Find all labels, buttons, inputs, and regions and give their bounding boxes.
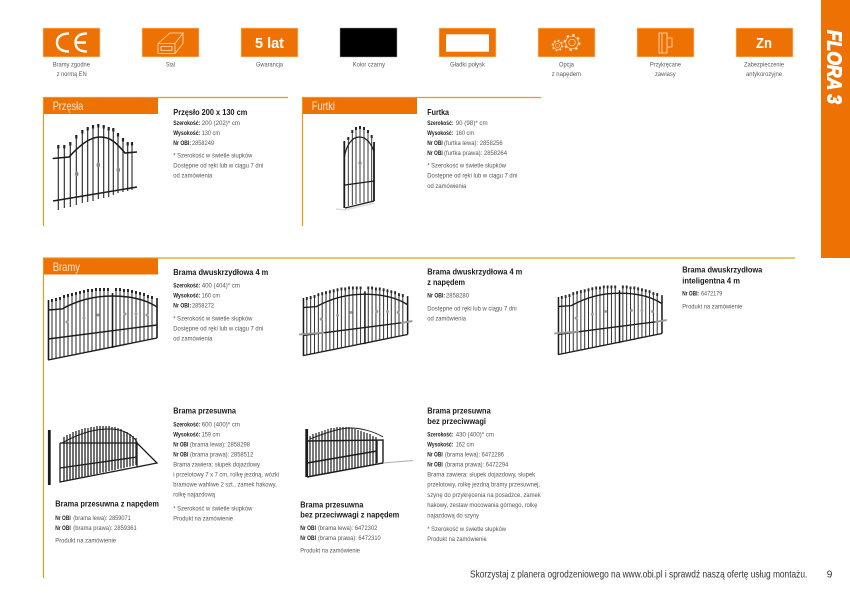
text block: Furtka: od zamówienia xyxy=(427,183,467,190)
text block: Brama przesuwna: Brama zawiera: słupek dojazdowy xyxy=(173,462,261,469)
text block: Brama przesuwna: rolkę najazdową xyxy=(173,492,215,499)
text block: Furtka xyxy=(427,108,517,190)
label: anticorrosion: antykorozyjne xyxy=(746,71,782,78)
label: warranty: Gwarancja xyxy=(256,62,283,69)
image: wicket gate xyxy=(336,126,374,210)
text block: Brama dwuskrzydłowa 4 m: Szerokość: xyxy=(173,284,200,290)
label: option with motor: z napędem xyxy=(552,71,581,78)
label: option with motor: Opcja xyxy=(559,62,574,69)
text block: Brama przesuwna: Nr OBI xyxy=(173,453,189,459)
text block: Brama przesuwna: i przelotowy 7 x 7 cm, rolkę jezdną, wózki xyxy=(173,472,279,479)
image: double gate xyxy=(48,288,157,360)
text block: Brama przesuwna bez przeciwwagi: Brama zawiera: słupek dojazdowy, słupek xyxy=(427,472,536,479)
text block: Brama dwuskrzydłowa z napędem: od zamówienia xyxy=(427,316,466,323)
text block: Brama inteligentna: Brama dwuskrzydłowa xyxy=(682,265,763,274)
heading: Przęsła: Przęsła xyxy=(53,99,84,113)
text block: Furtka: * Szerokość w świetle słupków xyxy=(427,163,506,170)
panel: Furtki xyxy=(302,98,541,226)
text block: Brama dwuskrzydłowa 4 m: Wysokość: xyxy=(173,294,200,300)
text block: Furtka: (furtka lewa): 2858256 xyxy=(444,140,503,147)
side tab: FLORA 3 xyxy=(821,0,850,258)
text block: Furtka: 160 cm xyxy=(456,130,474,137)
panel: Przęsła xyxy=(44,98,288,226)
text block: Furtka: Nr OBI xyxy=(427,141,443,147)
text block: Brama dwuskrzydłowa 4 m: * Szerokość w świetle słupków xyxy=(173,316,253,323)
text block: Brama dwuskrzydłowa 4 m: 400 (404)* cm xyxy=(202,283,240,290)
text block: Brama przesuwna bez przeciwwagi: (brama prawa): 6472294 xyxy=(445,462,509,469)
text block: Brama przesuwna: Nr OBI xyxy=(173,443,189,449)
label: colour: Kolor czarny xyxy=(353,62,386,69)
text block: Brama przesuwna z napędem: (brama prawa): 2859361 xyxy=(73,525,137,532)
text block: Brama przesuwna bez przeciwwagi z napędem: (brama prawa): 6472310 xyxy=(318,535,381,542)
text block: Brama przesuwna: Wysokość: xyxy=(173,433,200,439)
label: CE: z normą EN xyxy=(57,71,87,78)
text block: Brama przesuwna bez przeciwwagi xyxy=(427,406,541,543)
text block: Brama przesuwna bez przeciwwagi z napędem xyxy=(300,500,399,555)
text block: Brama dwuskrzydłowa 4 m: 2858272 xyxy=(192,303,214,310)
label: option with motor xyxy=(552,62,581,78)
text block: Brama przesuwna: Brama przesuwna xyxy=(173,406,237,415)
label: hinges: Przykręcane xyxy=(650,62,681,69)
text block: Brama przesuwna bez przeciwwagi: najazdową do szyny xyxy=(427,513,480,520)
panel: Bramy xyxy=(44,258,795,578)
text block: Brama przesuwna bez przeciwwagi: szynę do przykręcenia na posadzce, zamek xyxy=(427,492,541,499)
text block: Brama przesuwna: Produkt na zamówienie xyxy=(173,516,233,523)
text block: Brama dwuskrzydłowa 4 m: 160 cm xyxy=(202,293,220,300)
text block: Brama przesuwna: * Szerokość w świetle słupków xyxy=(173,506,253,513)
text block: Brama dwuskrzydłowa 4 m: Nr OBI: xyxy=(173,304,191,310)
text block: Brama dwuskrzydłowa z napędem: Brama dwuskrzydłowa 4 m xyxy=(427,267,522,276)
label: CE xyxy=(53,62,90,78)
image: sliding gate without counterweight xyxy=(307,427,413,477)
label: steel: Stal xyxy=(166,62,175,69)
text block: Przęsło: * Szerokość w świetle słupków xyxy=(173,153,253,160)
text block: Brama przesuwna bez przeciwwagi: Brama przesuwna xyxy=(427,406,491,415)
text block: Brama dwuskrzydłowa 4 m: Brama dwuskrzydłowa 4 m xyxy=(173,268,268,277)
icon: 5 year warranty xyxy=(241,28,298,57)
text block: Przęsło: Nr OBI: xyxy=(173,141,191,147)
text block: Brama inteligentna: 6472179 xyxy=(701,291,723,298)
text block: Brama inteligentna xyxy=(682,265,763,310)
text block: Przęsło: 2858249 xyxy=(192,140,214,147)
text block: Furtka: (furtka prawa): 2858264 xyxy=(444,150,507,157)
text block: Furtka: 90 (98)* cm xyxy=(456,120,488,127)
text block: Przęsło: 130 cm xyxy=(202,130,220,137)
text block: Brama inteligentna: Produkt na zamówienie xyxy=(682,303,743,310)
text block: Brama inteligentna: Nr OBI: xyxy=(682,292,699,298)
label: gloss: Gładki połysk xyxy=(450,62,486,69)
label: anticorrosion xyxy=(744,62,784,78)
icon: bolted hinges xyxy=(637,28,694,57)
text block: Brama przesuwna bez przeciwwagi z napędem: (brama lewa): 6472302 xyxy=(318,525,378,532)
text block: Brama dwuskrzydłowa 4 m: od zamówienia xyxy=(173,336,213,343)
text block: Brama dwuskrzydłowa z napędem: Nr OBI: xyxy=(427,294,445,300)
icon: CE mark xyxy=(43,28,100,57)
text block: Brama inteligentna: inteligentna 4 m xyxy=(682,276,740,285)
text block: Brama przesuwna bez przeciwwagi z napędem: Brama przesuwna xyxy=(300,500,364,509)
icon: steel profile xyxy=(142,28,199,57)
text block: Furtka: Furtka xyxy=(427,108,449,117)
text block: Brama przesuwna bez przeciwwagi: Nr OBI xyxy=(427,463,443,469)
label: CE: Bramy zgodne xyxy=(53,62,90,69)
text block: Brama dwuskrzydłowa 4 m xyxy=(173,268,268,343)
text block: Brama dwuskrzydłowa 4 m: Dostępne od ręki lub w ciągu 7 dni xyxy=(173,326,263,333)
text block: Furtka: Nr OBI xyxy=(427,151,443,157)
text block: Brama przesuwna: Szerokość: xyxy=(173,423,200,429)
icon: smooth gloss xyxy=(439,28,496,57)
text block: Brama przesuwna z napędem: Nr OBI xyxy=(55,526,71,532)
text block: Brama przesuwna bez przeciwwagi z napędem: Produkt na zamówienie xyxy=(300,548,360,555)
text block: Brama przesuwna bez przeciwwagi: Nr OBI xyxy=(427,453,443,459)
heading: Bramy: Bramy xyxy=(53,260,80,274)
image: fence panel xyxy=(53,124,137,210)
text block: Brama dwuskrzydłowa z napędem: 2858280 xyxy=(446,293,469,300)
icon: zinc xyxy=(736,28,793,57)
text block: Brama przesuwna z napędem: Nr OBI xyxy=(55,516,71,522)
icon: 5 year warranty: 5 lat xyxy=(255,36,284,52)
text block: Furtka: Wysokość: xyxy=(427,131,453,137)
icon: black colour xyxy=(340,28,397,57)
text block: Brama przesuwna bez przeciwwagi z napędem: bez przeciwwagi z napędem xyxy=(300,510,399,519)
text block: Przęsło: od zamówienia xyxy=(173,173,213,180)
text block: Furtka: Dostępne od ręki lub w ciągu 7 dni xyxy=(427,173,517,180)
icon: zinc: Zn xyxy=(756,36,772,52)
text block: Brama przesuwna: bramowe wahliwe 2 szt., zamek hakowy, xyxy=(173,482,277,489)
label: hinges xyxy=(650,62,681,78)
text block: Brama przesuwna bez przeciwwagi: Wysokość: xyxy=(427,443,453,449)
text block: Brama przesuwna bez przeciwwagi: przelotowy, rolkę jezdną bramy przesuwnej, xyxy=(427,482,540,489)
text block: Brama dwuskrzydłowa z napędem: Dostępne od ręki lub w ciągu 7 dni xyxy=(427,306,517,313)
icon: gears xyxy=(538,28,595,57)
text block: Brama przesuwna z napędem xyxy=(55,500,159,545)
text block: Przęsło: Przęsło 200 x 130 cm xyxy=(173,108,247,117)
label: hinges: zawiasy xyxy=(655,71,676,78)
text block: Brama przesuwna bez przeciwwagi: hakowy, zestaw mocowania górnego, rolkę xyxy=(427,502,538,509)
text block: Przęsło: 200 (202)* cm xyxy=(202,120,240,127)
image: sliding gate xyxy=(49,426,157,485)
text block: Brama przesuwna bez przeciwwagi: 162 cm xyxy=(456,442,474,449)
image: double gate with motor xyxy=(299,286,412,356)
label: anticorrosion: Zabezpieczenie xyxy=(744,62,784,69)
text block: Brama przesuwna bez przeciwwagi: 430 (400)* cm xyxy=(456,432,494,439)
text block: Brama przesuwna bez przeciwwagi: (brama lewa): 6472286 xyxy=(445,452,504,459)
text block: Brama przesuwna bez przeciwwagi z napędem: Nr OBI xyxy=(300,536,316,542)
text block: Przęsło xyxy=(173,108,263,180)
side tab: FLORA 3: FLORA 3 xyxy=(822,30,844,104)
text block: Brama dwuskrzydłowa z napędem: z napędem xyxy=(427,278,465,287)
text block: Brama przesuwna: (brama prawa): 2858512 xyxy=(190,452,254,459)
text block: Brama przesuwna bez przeciwwagi: * Szerokość w świetle słupków xyxy=(427,526,506,533)
page number: 9 xyxy=(827,570,833,581)
text block: Przęsło: Wysokość: xyxy=(173,131,200,137)
text block: Brama przesuwna bez przeciwwagi: bez przeciwwagi xyxy=(427,417,486,426)
text block: Furtka: Szerokość: xyxy=(427,121,453,127)
image: intelligent double gate xyxy=(554,285,667,355)
text block: Brama przesuwna: (brama lewa): 2858298 xyxy=(190,442,250,449)
text block: Brama przesuwna bez przeciwwagi z napędem: Nr OBI xyxy=(300,526,316,532)
text block: Przęsło: Szerokość: xyxy=(173,121,200,127)
text block: Brama dwuskrzydłowa z napędem xyxy=(427,267,522,323)
text block: Brama przesuwna bez przeciwwagi: Szerokość: xyxy=(427,433,453,439)
text block: Brama przesuwna z napędem: Produkt na zamówienie xyxy=(55,538,116,545)
heading: Furtki: Furtki xyxy=(312,99,335,113)
text block: Brama przesuwna z napędem: (brama lewa): 2859071 xyxy=(73,515,131,522)
text block: Brama przesuwna bez przeciwwagi: Produkt na zamówienie xyxy=(427,536,487,543)
text block: Brama przesuwna: 600 (400)* cm xyxy=(202,422,240,429)
text block: Brama przesuwna z napędem: Brama przesuwna z napędem xyxy=(55,500,159,509)
text block: Przęsło: Dostępne od ręki lub w ciągu 7 dni xyxy=(173,163,263,170)
text block: Brama przesuwna xyxy=(173,406,279,523)
text block: Brama przesuwna: 159 cm xyxy=(202,432,220,439)
